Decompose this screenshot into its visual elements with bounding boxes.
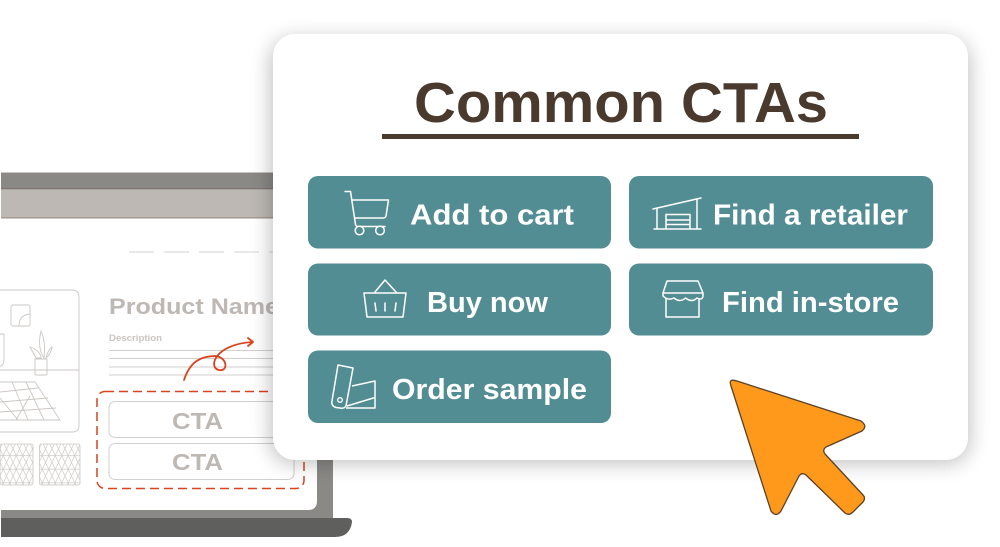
icon: color swatch fan (332, 365, 375, 408)
card shadow (270, 38, 970, 464)
browser bar (1, 189, 317, 218)
title: Common CTAs (414, 71, 828, 135)
laptop screen (0, 218, 317, 510)
button: Add to cart (308, 176, 611, 248)
label: Find a retailer (713, 200, 908, 232)
CTA placeholder 1: CTA (172, 408, 223, 434)
description lines (109, 350, 280, 375)
dashed nav line (129, 251, 280, 253)
button: Find a retailer (629, 176, 933, 248)
icon: warehouse (653, 198, 701, 229)
CTA placeholder 2 (109, 444, 294, 480)
product name: Product Name (109, 294, 279, 319)
icon: basket (364, 280, 406, 317)
icon: storefront (663, 281, 703, 317)
label: Find in-store (722, 287, 899, 319)
label: Order sample (392, 374, 587, 406)
CTA placeholder 2: CTA (172, 449, 223, 475)
browser bar edges (1, 189, 317, 218)
pattern swatch 2 (40, 444, 80, 485)
laptop mockup (0, 172, 352, 537)
title underline (382, 134, 859, 139)
laptop base (1, 518, 352, 537)
icon: orange cursor arrow (730, 380, 865, 514)
laptop frame (1, 172, 333, 518)
button: Buy now (308, 264, 611, 336)
label: Add to cart (410, 200, 574, 232)
red curved arrow (184, 338, 253, 380)
description: Description (109, 333, 162, 343)
panel: Common CTAs card (273, 34, 968, 460)
icon: shopping cart (345, 192, 388, 226)
label: Buy now (427, 287, 548, 319)
CTA placeholder 1 (109, 402, 294, 438)
button: Order sample (308, 350, 611, 423)
room illustration (0, 290, 79, 432)
button: Find in-store (629, 264, 933, 336)
pattern swatch 1 (0, 444, 33, 485)
red dashed highlight (97, 392, 304, 488)
